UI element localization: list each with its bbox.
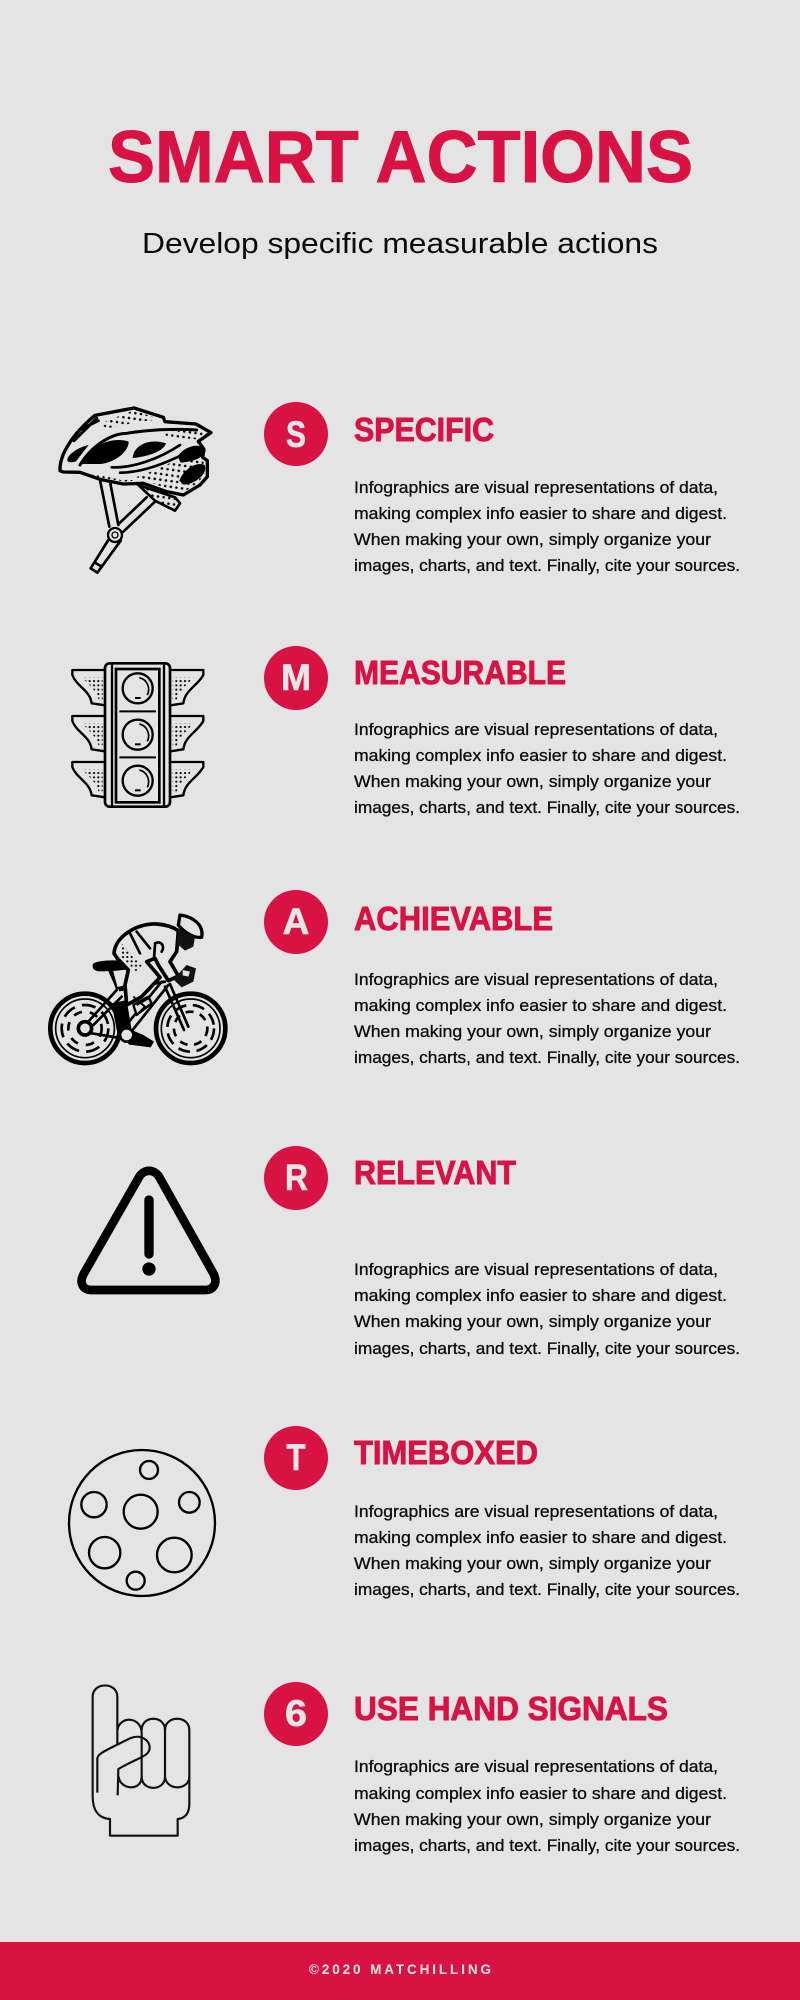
heading: measurable: MEASURABLE <box>354 654 566 691</box>
text block: measurable: making complex info easier to share and digest. <box>354 747 727 765</box>
text block: use hand signals: making complex info easier to share and digest. <box>354 1785 727 1803</box>
badge: T <box>264 1426 328 1490</box>
badge: A: A <box>282 901 310 942</box>
text block: timeboxed: Infographics are visual representations of data, <box>354 1503 718 1521</box>
text block: measurable <box>354 721 740 817</box>
icon: bicycle helmet <box>60 408 211 573</box>
text block: achievable: images, charts, and text. Finally, cite your sources. <box>354 1049 740 1067</box>
heading: timeboxed: TIMEBOXED <box>354 1434 538 1471</box>
icon: cyclist <box>50 915 225 1063</box>
heading: achievable: ACHIEVABLE <box>354 900 553 937</box>
text block: specific: making complex info easier to share and digest. <box>354 505 727 523</box>
icon: warning triangle <box>82 1171 215 1290</box>
text block: relevant: Infographics are visual representations of data, <box>354 1261 718 1279</box>
text block: achievable: making complex info easier to share and digest. <box>354 997 727 1015</box>
badge: 6: 6 <box>285 1693 307 1734</box>
panel: specific <box>60 402 740 575</box>
text block: achievable <box>354 971 740 1067</box>
text block: measurable: When making your own, simply organize your <box>354 773 712 791</box>
badge: M <box>264 646 328 710</box>
title: SMART ACTIONS <box>108 117 693 198</box>
badge: R <box>264 1146 328 1210</box>
text block: relevant: making complex info easier to share and digest. <box>354 1287 727 1305</box>
text block: specific <box>354 479 740 575</box>
footer text: ©2020 MATCHILLING <box>309 1962 491 1977</box>
text block: use hand signals: When making your own, simply organize your <box>354 1811 712 1829</box>
badge: S <box>264 402 328 466</box>
text block: timeboxed: When making your own, simply organize your <box>354 1555 712 1573</box>
text block: measurable: Infographics are visual representations of data, <box>354 721 718 739</box>
icon: hand signal <box>93 1685 189 1836</box>
heading: specific: SPECIFIC <box>354 411 494 448</box>
text block: timeboxed: making complex info easier to share and digest. <box>354 1529 727 1547</box>
text block: relevant: images, charts, and text. Finally, cite your sources. <box>354 1340 740 1358</box>
text block: timeboxed <box>354 1503 740 1599</box>
panel: relevant <box>82 1146 740 1358</box>
text block: achievable: When making your own, simply organize your <box>354 1023 712 1041</box>
badge: 6 <box>264 1682 328 1746</box>
icon: round dial with holes <box>69 1450 215 1596</box>
text block: specific: images, charts, and text. Finally, cite your sources. <box>354 557 740 575</box>
subtitle: Develop specific measurable actions <box>142 228 658 260</box>
heading: relevant: RELEVANT <box>354 1154 516 1191</box>
text block: achievable: Infographics are visual representations of data, <box>354 971 718 989</box>
panel: timeboxed <box>69 1426 740 1599</box>
badge: R: R <box>285 1157 308 1198</box>
text block: relevant: When making your own, simply organize your <box>354 1313 712 1331</box>
badge: T: T <box>286 1437 306 1478</box>
badge: A <box>264 890 328 954</box>
icon: traffic light <box>72 663 203 807</box>
text block: specific: When making your own, simply organize your <box>354 531 712 549</box>
panel: measurable <box>72 646 740 817</box>
text block: use hand signals: images, charts, and text. Finally, cite your sources. <box>354 1837 740 1855</box>
panel: achievable <box>50 890 740 1067</box>
panel: use hand signals <box>93 1682 740 1855</box>
badge: S: S <box>286 414 306 455</box>
text block: use hand signals: Infographics are visual representations of data, <box>354 1758 718 1776</box>
text block: timeboxed: images, charts, and text. Finally, cite your sources. <box>354 1581 740 1599</box>
heading: use hand signals: USE HAND SIGNALS <box>354 1690 668 1727</box>
text block: relevant <box>354 1261 740 1358</box>
footer band <box>0 1942 800 2000</box>
badge: M: M <box>281 657 311 698</box>
text block: specific: Infographics are visual representations of data, <box>354 479 718 497</box>
text block: measurable: images, charts, and text. Finally, cite your sources. <box>354 799 740 817</box>
text block: use hand signals <box>354 1758 740 1855</box>
